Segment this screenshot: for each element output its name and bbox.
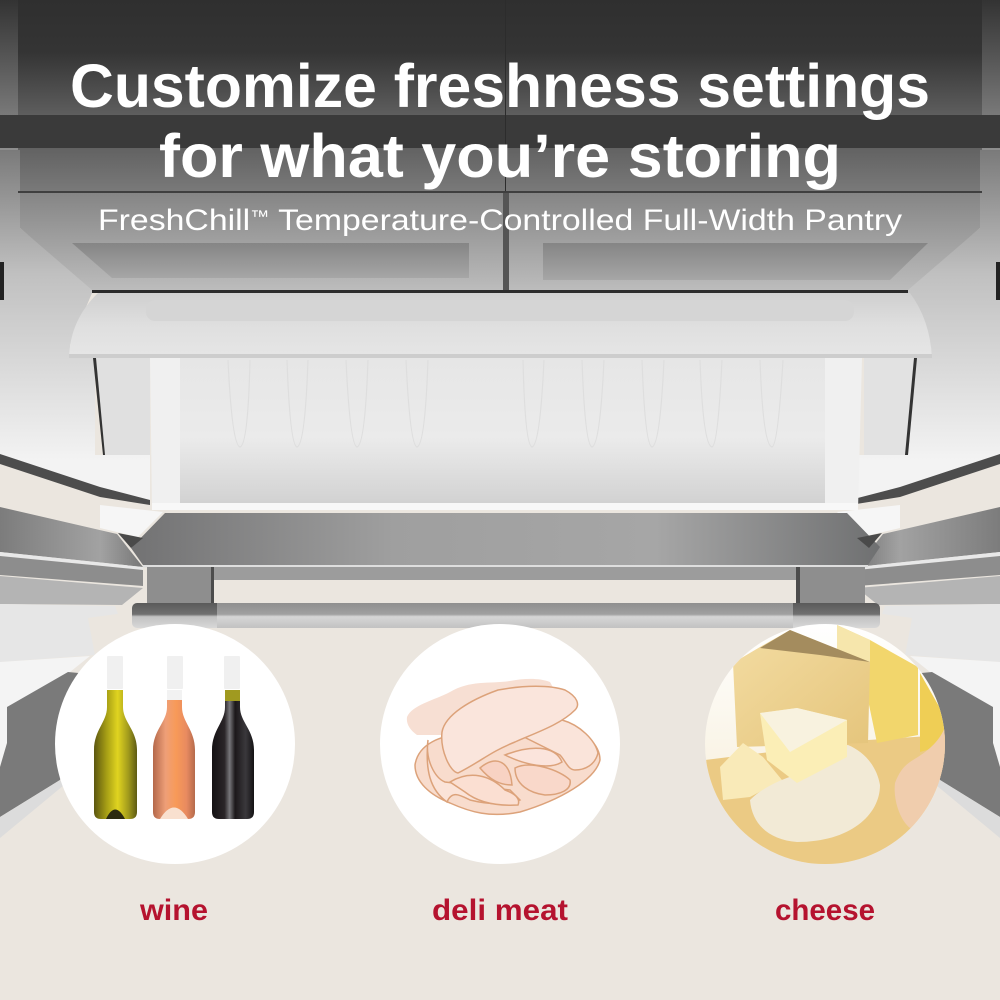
icon: cheese assortment [705, 625, 945, 870]
cheese label: cheese [775, 894, 875, 927]
subtitle: ™ [250, 207, 269, 226]
title: Customize freshness settings [70, 52, 930, 120]
title [70, 52, 930, 190]
title: for what you’re storing [159, 122, 841, 190]
deli meat image circle [380, 624, 620, 864]
cheese image circle [705, 624, 945, 864]
pantry drawer side fins [95, 358, 150, 455]
icon: sliced meat [407, 679, 600, 814]
handle brackets [147, 567, 213, 607]
item: deli meat [380, 624, 620, 927]
icon: red wine bottle [212, 656, 254, 819]
deli meat label: deli meat [432, 894, 568, 927]
icon: white wine bottle [94, 656, 137, 819]
steel front panel [131, 513, 880, 565]
handle bar [132, 603, 880, 628]
bin ribs [228, 360, 783, 447]
wine image circle [55, 624, 295, 864]
upper fridge shelf [0, 0, 1000, 115]
upper drawers [20, 193, 503, 290]
pantry bin [150, 358, 862, 510]
pantry lid [69, 293, 932, 358]
wine label: wine [139, 894, 208, 927]
icon: rose wine bottle [153, 656, 195, 819]
subtitle: FreshChill [98, 204, 233, 237]
item: wine [55, 624, 295, 927]
door walls left and right [0, 0, 163, 838]
item: cheese [705, 624, 945, 927]
subtitle: Temperature-Controlled Full-Width Pantry [269, 204, 902, 237]
